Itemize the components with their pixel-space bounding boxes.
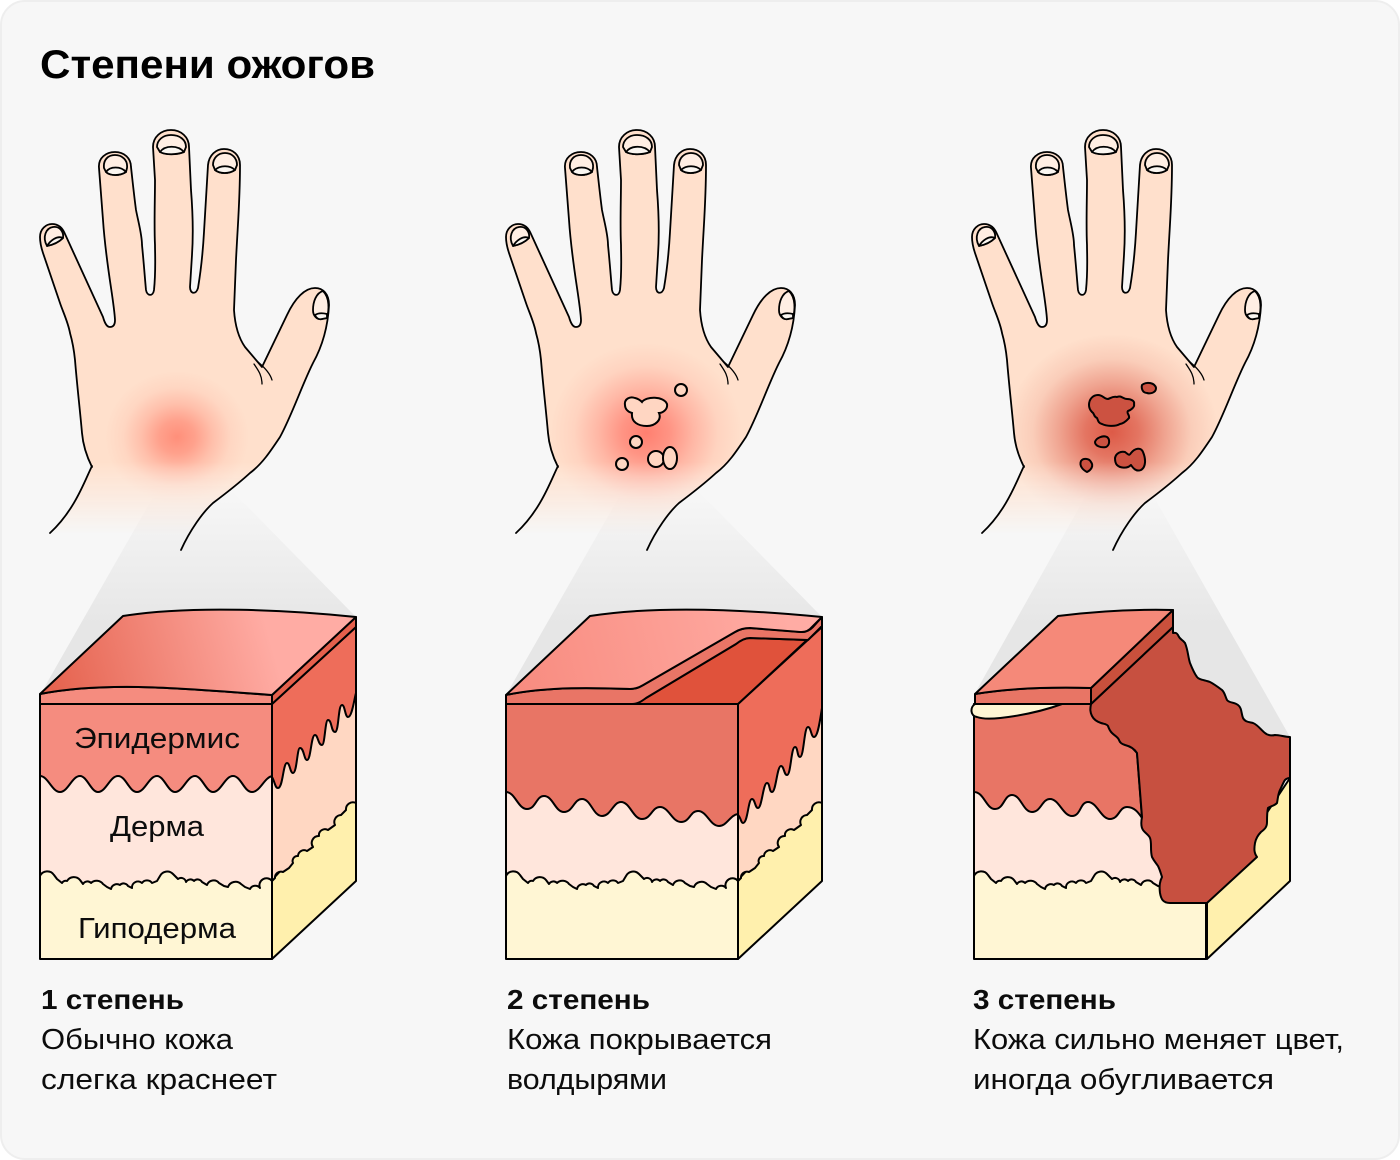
hand 1: first degree burn [40,130,329,550]
skin with red glow [506,130,795,550]
top face [506,610,822,695]
epidermis front [506,704,738,826]
top face [40,610,356,695]
hand 3: third degree burn [972,130,1261,550]
top strip front [975,688,1091,704]
skin with red glow [40,130,329,550]
hypodermis and dermis front [506,704,738,959]
label: epidermis: Эпидермис [74,723,240,755]
caption 3 line 2: иногда обугливается [973,1064,1274,1096]
epidermis side [738,627,822,823]
caption 3 [973,984,1344,1096]
caption 3 line 1: Кожа сильно меняет цвет, [973,1024,1344,1056]
caption 1 line 2: слегка краснеет [41,1064,277,1096]
hand 2: second degree burn [506,130,795,550]
caption 2 heading: 2 степень [507,984,650,1015]
hypodermis and dermis front [40,704,272,959]
lifted epidermis strip [506,617,822,704]
peeled blister [971,704,1062,719]
epidermis front [974,704,1142,819]
blister floor [636,638,807,704]
charred patches [1080,383,1156,472]
hypodermis side [1207,778,1290,959]
cube 3: skin layers, third degree [971,610,1290,959]
cube 1: skin layers, first degree [40,610,356,959]
caption 2 line 1: Кожа покрывается [507,1024,772,1056]
hypodermis and dermis front [974,704,1206,959]
caption 1 heading: 1 степень [41,984,184,1015]
hand outline and nails [506,130,795,550]
epidermis side [272,627,356,788]
zoom wedge 1 [40,490,356,700]
hypodermis and dermis side [738,625,822,959]
title: Степени ожогов [40,43,375,87]
caption 3 heading: 3 степень [973,984,1116,1015]
caption 2 line 2: волдырями [507,1064,667,1096]
caption 1 line 1: Обычно кожа [41,1024,234,1056]
caption 2 [507,984,772,1096]
top face [975,610,1173,694]
hypodermis and dermis side [272,625,356,959]
top strip side [272,617,356,704]
skin with dark glow [972,130,1261,550]
label: hypodermis: Гиподерма [78,913,237,945]
zoom wedge 2 [506,490,822,700]
top strip front [40,687,272,704]
blisters [616,384,687,470]
label: dermis: Дерма [110,811,205,843]
cube 2: skin layers, second degree [506,610,822,959]
charred wound [1090,627,1290,903]
top strip side [1091,610,1173,704]
zoom wedge 3 [974,490,1290,740]
hand outline and nails [40,130,329,550]
epidermis front [40,704,272,792]
caption 1 [41,984,277,1096]
hand outline and nails [972,130,1261,550]
